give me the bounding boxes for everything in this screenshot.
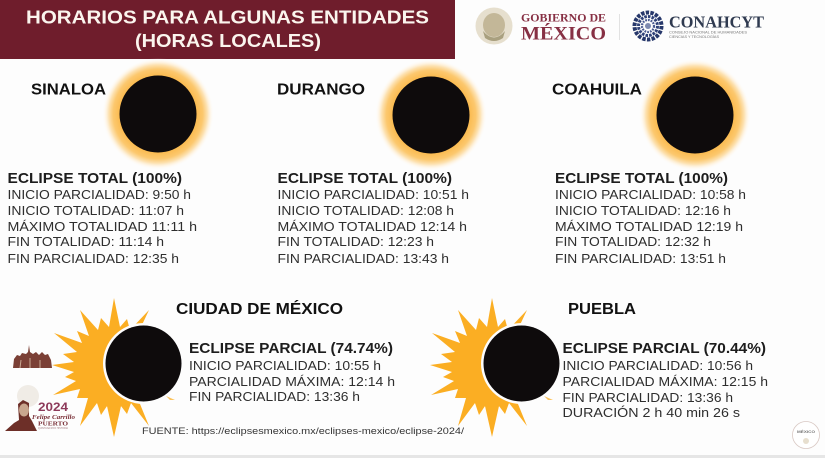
text block: Coahuila times: FIN PARCIALIDAD: 13:51 h	[555, 251, 726, 266]
heading: Durango: DURANGO	[277, 82, 365, 98]
logo: 2024 Felipe Carrillo Puerto	[5, 385, 75, 431]
text block: Puebla times: INICIO PARCIALIDAD: 10:56 h	[562, 358, 753, 373]
text block: Coahuila times: INICIO PARCIALIDAD: 10:58 h	[555, 187, 746, 202]
text block: Durango times: FIN PARCIALIDAD: 13:43 h	[278, 251, 449, 266]
panel: Durango	[277, 59, 487, 266]
heading: Ciudad de México: CIUDAD DE MÉXICO	[176, 299, 343, 318]
logo: CONAHCYT: CIENCIAS Y TECNOLOGÍAS	[669, 35, 720, 39]
text block: Coahuila times	[555, 170, 746, 266]
heading: Sinaloa: SINALOA	[31, 82, 106, 98]
panel: Coahuila	[552, 59, 751, 266]
panel: Sinaloa	[8, 58, 214, 266]
logo: 2024 Felipe Carrillo Puerto: Felipe Carrillo	[32, 415, 75, 421]
icon: partial eclipse Ciudad de México	[52, 298, 184, 437]
heading: Puebla: PUEBLA	[568, 301, 636, 318]
text block: Sinaloa times: FIN TOTALIDAD: 11:14 h	[8, 234, 164, 249]
logo: CONAHCYT: CONAHCYT	[669, 12, 765, 32]
text block: Sinaloa times: FIN PARCIALIDAD: 12:35 h	[8, 251, 179, 266]
text block: Puebla times: ECLIPSE PARCIAL (70.44%)	[562, 340, 766, 357]
logo: circular seal: MÉXICO	[797, 429, 816, 434]
text block: Ciudad de México times: PARCIALIDAD MÁXIMA: 12:14 h	[189, 374, 395, 389]
header banner: (HORAS LOCALES)	[135, 30, 321, 51]
logo: historical figures	[13, 345, 52, 368]
panel: Ciudad de México	[52, 298, 395, 437]
text block: Durango times: MÁXIMO TOTALIDAD 12:14 h	[278, 219, 467, 234]
text block: Coahuila times: MÁXIMO TOTALIDAD 12:19 h	[555, 219, 743, 234]
text block: Durango times: INICIO PARCIALIDAD: 10:51 h	[278, 187, 469, 202]
logo: 2024 Felipe Carrillo Puerto: PUERTO	[38, 422, 68, 428]
text block: Ciudad de México times: ECLIPSE PARCIAL (74.74%)	[189, 340, 393, 357]
text block: Sinaloa times: MÁXIMO TOTALIDAD 11:11 h	[8, 219, 197, 234]
text block: Ciudad de México times: INICIO PARCIALIDAD: 10:55 h	[189, 358, 381, 373]
header banner: HORARIOS PARA ALGUNAS ENTIDADES	[26, 6, 429, 28]
logo: Gobierno de México: GOBIERNO DE	[521, 10, 606, 24]
heading: Coahuila: COAHUILA	[552, 82, 642, 98]
text block: Coahuila times: ECLIPSE TOTAL (100%)	[555, 170, 728, 187]
logo: 2024 Felipe Carrillo Puerto: 2024	[38, 400, 68, 414]
logo: Gobierno de México: MÉXICO	[521, 22, 606, 44]
panel: Puebla	[430, 298, 768, 437]
text block: Coahuila times: FIN TOTALIDAD: 12:32 h	[555, 234, 711, 249]
text block: Durango times: ECLIPSE TOTAL (100%)	[278, 170, 452, 187]
logo: CONAHCYT: CONSEJO NACIONAL DE HUMANIDADES	[669, 30, 748, 34]
icon: total eclipse Coahuila	[639, 59, 751, 171]
icon: total eclipse Sinaloa	[102, 58, 214, 170]
logo: Gobierno de México	[476, 8, 606, 44]
text block: Ciudad de México times: FIN PARCIALIDAD: 13:36 h	[189, 389, 360, 404]
text block: Ciudad de México times	[189, 340, 395, 404]
icon: partial eclipse Puebla	[430, 298, 562, 437]
text block: Puebla times: DURACIÓN 2 h 40 min 26 s	[562, 405, 740, 420]
text block: Sinaloa times: INICIO PARCIALIDAD: 9:50 h	[8, 187, 191, 202]
icon: total eclipse Durango	[375, 59, 487, 171]
logo: 2024 Felipe Carrillo Puerto: QUINTANA ROO HISTORIA	[38, 427, 68, 430]
text block: Puebla times: FIN PARCIALIDAD: 13:36 h	[562, 390, 733, 405]
text block: Coahuila times: INICIO TOTALIDAD: 12:16 h	[555, 203, 731, 218]
text block: Durango times	[278, 170, 469, 266]
text block: Durango times: INICIO TOTALIDAD: 12:08 h	[278, 203, 454, 218]
logo: circular seal	[792, 422, 820, 448]
logo: CONAHCYT	[634, 12, 765, 40]
text block: Sinaloa times: ECLIPSE TOTAL (100%)	[8, 170, 182, 187]
source citation: FUENTE: https://eclipsesmexico.mx/eclipses-mexico/eclipse-2024/	[142, 426, 464, 437]
header banner	[0, 0, 455, 59]
text block: Sinaloa times: INICIO TOTALIDAD: 11:07 h	[8, 203, 184, 218]
text block: Puebla times	[562, 340, 768, 420]
text block: Sinaloa times	[8, 170, 197, 266]
text block: Puebla times: PARCIALIDAD MÁXIMA: 12:15 h	[562, 374, 768, 389]
text block: Durango times: FIN TOTALIDAD: 12:23 h	[278, 234, 434, 249]
